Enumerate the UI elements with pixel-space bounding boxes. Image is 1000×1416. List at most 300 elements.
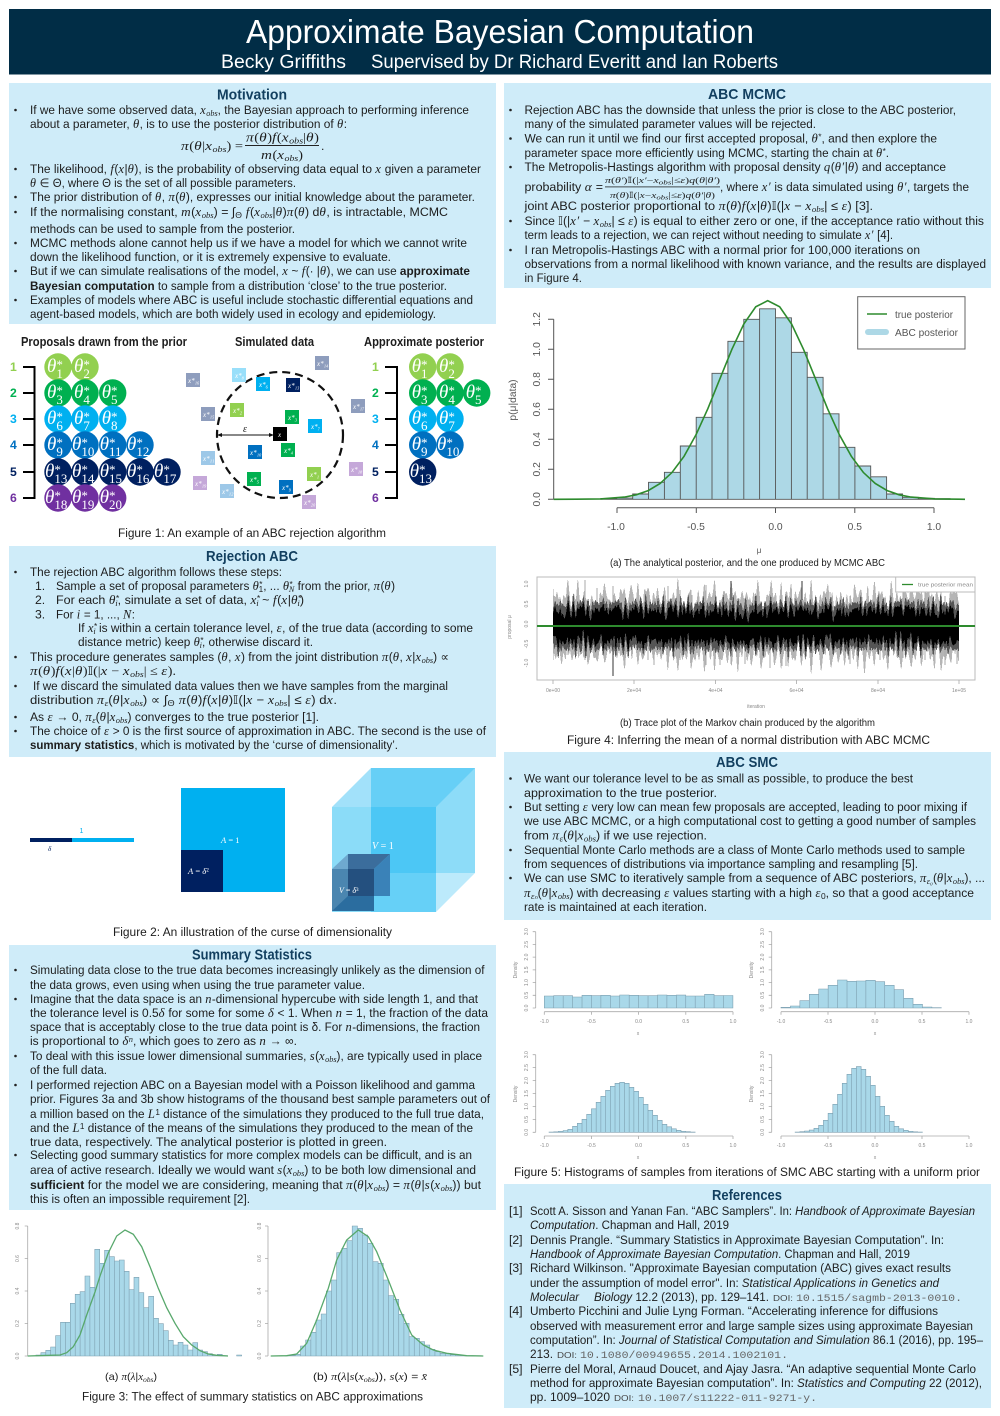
- text block: motivation bullets: , the Bayesian approach to performing inference: [218, 103, 469, 117]
- text block: motivation bullets: The likelihood, f(x|θ), is the probability of observing data equal to x given a parameter: [30, 161, 481, 176]
- text block: rejection bullets: 3.: [35, 608, 45, 622]
- heading: motivation: Motivation: [217, 86, 287, 104]
- text block: SMC bullets: (: [933, 871, 937, 885]
- caption: figure 3: Figure 3: The effect of summary statistics on ABC approximations: [82, 1390, 423, 1404]
- line illustration: [30, 828, 134, 853]
- proposal circles: *: [56, 409, 63, 424]
- header banner: [9, 9, 991, 74]
- accepted proposal circles: 2: [448, 366, 455, 381]
- text block: summary bullets: the tolerance level is 0.5δ for some for some δ < 1. When n = 1, the fraction of the data: [30, 1005, 488, 1020]
- text block: reference list: Pierre del Moral, Arnaud Doucet, and Ajay Jasra. “An adaptive sequential Monte Carlo: [530, 1362, 976, 1376]
- text block: summary bullets: 1: [80, 1121, 85, 1131]
- text block: summary bullets: area of active research. Ideally we would want s(x: [30, 1162, 293, 1177]
- axes: [507, 580, 966, 710]
- chart: iteration 2: 1.0: [760, 979, 766, 986]
- proposal circles: θ: [72, 487, 81, 508]
- text block: MCMC bullets: I ran Metropolis-Hastings ABC with a normal prior for 100,000 iterations on: [524, 243, 920, 257]
- chart caption b: )),: [375, 1371, 390, 1383]
- chart: histogram b: 0.0: [257, 1352, 263, 1359]
- text block: motivation bullets: MCMC methods alone cannot help us if we have a model for which we cannot write: [30, 236, 467, 250]
- text block: rejection bullets: summary statistics, which is motivated by the ‘curse of dimensionality’.: [30, 738, 398, 752]
- chart: iteration 1: 2.0: [524, 953, 530, 961]
- trace: [535, 580, 977, 676]
- proposal circles: 1: [56, 366, 63, 381]
- axes: -1.0: [524, 658, 530, 667]
- accepted proposal circles: θ: [412, 382, 421, 403]
- axes: 8e+04: [871, 688, 885, 694]
- chart: iteration 1: 3.0: [524, 928, 530, 935]
- chart: histogram b: [257, 1222, 483, 1359]
- left bracket with group numbers: 3: [10, 412, 17, 426]
- text block: SMC bullets: ε: [560, 834, 564, 844]
- chart caption a: ): [153, 1371, 157, 1383]
- text block: summary bullets: prior. Figures 3a and 3b show histograms of the thousand best sample parameters out of: [30, 1092, 491, 1106]
- text block: rejection bullets: For each θ: [56, 592, 116, 607]
- text block: MCMC bullets: | ≤: [824, 199, 842, 213]
- accepted proposal circles: θ: [439, 382, 448, 403]
- left bracket with group numbers: 1: [10, 360, 17, 374]
- chart: iteration 1: 1.0: [730, 1019, 737, 1025]
- proposal circles: θ: [72, 461, 81, 482]
- simulated data scatter: x*₁: [309, 471, 319, 479]
- chart: iteration 3: 0.0: [524, 1129, 530, 1136]
- text block: summary bullets: obs: [293, 1168, 305, 1178]
- cube illustration: V = 1: [372, 841, 394, 852]
- text block: summary bullets: the data grows, even using when using the true parameter value.: [30, 978, 365, 992]
- simulated data scatter: x*₈: [234, 372, 245, 380]
- text block: summary bullets: Selecting good summary statistics for more complex models can be difficult, and is an: [30, 1148, 472, 1162]
- proposal circles: θ: [100, 434, 109, 455]
- text block: SMC bullets: [509, 772, 985, 914]
- text block: reference list: [5]: [509, 1362, 523, 1376]
- epsilon arrow: ε: [243, 424, 247, 435]
- text block: rejection bullets: ε).: [161, 663, 175, 678]
- x axis: 0.5: [848, 522, 862, 533]
- text block: summary bullets: ) to be both low dimensional and: [304, 1163, 476, 1177]
- text block: motivation bullets: obs: [202, 210, 214, 220]
- accepted proposal circles: 7: [448, 418, 455, 433]
- accepted proposal circles: 4: [448, 392, 455, 407]
- y axis: [508, 312, 554, 506]
- text block: SMC bullets: ε values starting with a high ε: [664, 885, 821, 900]
- right bracket with group numbers: [372, 360, 397, 505]
- text block: MCMC bullets: , and then explore the: [822, 132, 937, 146]
- text block: SMC bullets: εₙ: [531, 891, 538, 901]
- chart: iteration 4: 0.0: [760, 1129, 766, 1136]
- proposal circles: θ: [154, 461, 163, 482]
- text block: rejection bullets: f(x|θ: [273, 592, 298, 607]
- accepted proposal circles: 6: [421, 418, 428, 433]
- chart: iteration 4: [749, 1051, 973, 1161]
- text block: motivation bullets: agent-based models, which are both widely used in ecology and epidemiology.: [30, 307, 436, 321]
- text block: rejection bullets: 1: [259, 584, 263, 594]
- text block: reference list: 10.1515/sagmb-2013-0010.: [796, 1293, 962, 1305]
- text block: SMC bullets: rate is maintained at each iteration.: [524, 900, 707, 914]
- text block: MCMC bullets: ε) [3].: [842, 198, 872, 213]
- chart: iteration 4: 3.0: [760, 1051, 766, 1058]
- x axis: 0.0: [768, 522, 783, 533]
- chart: iteration 4: 0.5: [919, 1143, 926, 1149]
- equation: posterior: obs: [289, 136, 304, 146]
- text block: motivation bullets: ) = ∫: [214, 205, 236, 219]
- left bracket with group numbers: [10, 360, 34, 505]
- heading: ABC SMC: ABC SMC: [716, 754, 778, 771]
- text block: rejection bullets: , simulate a set of data,: [118, 593, 250, 607]
- chart: iteration 1: 0.0: [524, 1004, 530, 1011]
- text block: reference list: 213.: [530, 1347, 553, 1361]
- chart: iteration 4: 1.0: [966, 1143, 973, 1149]
- text block: SMC bullets: (: [563, 828, 567, 842]
- chart: iteration 3: 0.0: [635, 1143, 642, 1149]
- proposal circles: 8: [111, 418, 118, 433]
- text block: summary bullets: sufficient for the model we are considering, meaning that π(θ|x: [30, 1177, 374, 1192]
- true posterior curve: [554, 301, 965, 499]
- accepted proposal circles: *: [446, 435, 453, 450]
- caption: figure 4b: (b) Trace plot of the Markov chain produced by the algorithm: [620, 718, 875, 729]
- text block: reference list: [2]: [509, 1233, 523, 1247]
- text block: rejection bullets: *: [257, 593, 261, 603]
- chart: iteration 4: 2.5: [760, 1064, 766, 1071]
- text block: MCMC bullets: ε) is equal to either zero or one, if the acceptance ratio without this: [628, 213, 986, 228]
- text block: rejection bullets: | ≤: [144, 664, 161, 678]
- text block: summary bullets: is proportional to δ: [30, 1033, 129, 1048]
- text block: reference list: Richard Wilkinson. "Approximate Bayesian computation (ABC) gives exact results: [530, 1261, 951, 1275]
- figure 5: SMC histograms: [513, 928, 980, 1179]
- proposal circles: 19: [81, 497, 94, 512]
- equation: acceptance ratio: [605, 175, 720, 202]
- text block: rejection bullets: obs: [422, 655, 434, 665]
- text block: rejection bullets: obs: [116, 715, 128, 725]
- chart: iteration 4: 2.0: [760, 1077, 766, 1084]
- chart: iteration 4: -0.5: [824, 1143, 833, 1149]
- text block: motivation bullets: [14, 102, 481, 321]
- heading: ABC MCMC: ABC MCMC: [708, 86, 786, 103]
- equation: posterior: .: [321, 139, 324, 153]
- text block: rejection bullets: from the prior,: [294, 579, 374, 593]
- proposal circles: θ: [100, 461, 109, 482]
- text block: rejection bullets: ) converges to the true posterior [1].: [128, 710, 319, 724]
- text block: motivation bullets: f: [242, 204, 252, 219]
- chart: iteration 2: -0.5: [824, 1019, 833, 1025]
- proposal circles: 17: [163, 471, 177, 486]
- caption: figure 4a: (a) The analytical posterior, and the one produced by MCMC ABC: [610, 558, 885, 569]
- chart: iteration 1: x: [637, 1031, 640, 1037]
- proposal circles: 13: [54, 471, 67, 486]
- proposal circles: 9: [56, 444, 63, 459]
- text block: rejection bullets: N: [288, 584, 296, 594]
- proposal circles: θ: [127, 461, 136, 482]
- chart: iteration 3: 1.0: [730, 1143, 737, 1149]
- text block: MCMC bullets: | ≤: [612, 214, 628, 228]
- proposal circles: θ: [74, 408, 83, 429]
- y axis: p(μ|data): [508, 379, 519, 421]
- chart: iteration 2: 3.0: [760, 928, 766, 935]
- accepted proposal circles: *: [419, 462, 426, 477]
- proposal circles: 5: [111, 392, 118, 407]
- axes: iteration: [747, 704, 765, 710]
- chart: iteration 2: 0.5: [760, 992, 766, 999]
- chart: histogram a: 0.2: [15, 1320, 21, 1327]
- chart: iteration 2: 2.5: [760, 941, 766, 948]
- chart: iteration 1: 2.5: [524, 941, 530, 948]
- text block: MCMC bullets: Rejection ABC has the downside that unless the prior is close to the ABC posterior,: [524, 103, 956, 117]
- text block: MCMC bullets: [509, 103, 986, 285]
- proposal circles: θ: [127, 434, 136, 455]
- proposal circles: 3: [56, 392, 63, 407]
- text block: MCMC bullets: probability α =: [524, 179, 603, 194]
- chart: iteration 2: [749, 928, 973, 1037]
- accepted proposal circles: θ: [439, 408, 448, 429]
- proposal circles: θ: [47, 356, 56, 377]
- text block: summary bullets: obs: [325, 1054, 337, 1064]
- text block: reference list: Biology 12.2 (2013), pp. 129–141.: [594, 1290, 769, 1304]
- equation: acceptance ratio: |≤: [669, 190, 678, 200]
- authors: Becky Griffiths: [221, 52, 346, 73]
- axes: 1e+05: [952, 688, 966, 694]
- text block: rejection bullets: *: [116, 593, 120, 603]
- heading: references: References: [712, 1187, 782, 1204]
- text block: rejection bullets: (θ)f(x|θ)𝕀(|x − x: [186, 692, 274, 707]
- chart: iteration 3: 2.0: [524, 1077, 530, 1084]
- supervisors: Supervised by Dr Richard Everitt and Ian Roberts: [371, 52, 778, 73]
- chart: iteration 4: 1.5: [760, 1090, 766, 1097]
- left bracket with group numbers: 4: [10, 438, 17, 452]
- chart: iteration 2: 2.0: [760, 953, 766, 961]
- proposal circles: *: [83, 383, 90, 398]
- text block: rejection bullets: | ≤: [287, 693, 305, 707]
- text block: rejection bullets: The rejection ABC algorithm follows these steps:: [30, 565, 282, 579]
- text block: rejection bullets: ε, of the true data (according to some: [277, 620, 478, 635]
- text block: SMC bullets: obs: [584, 834, 597, 844]
- caption: figure 4: Figure 4: Inferring the mean of a normal distribution with ABC MCMC: [567, 733, 930, 747]
- figure 1: ABC rejection diagram: [10, 335, 490, 540]
- proposal circles: 2: [83, 366, 90, 381]
- proposal circles: 7: [83, 418, 90, 433]
- text block: SMC bullets: (: [538, 886, 542, 900]
- simulated data scatter: x*₁₇: [352, 403, 365, 411]
- text block: rejection bullets: ε: [105, 698, 109, 708]
- equation: posterior: m(x: [261, 147, 284, 162]
- text block: MCMC bullets: *: [883, 146, 886, 156]
- text block: rejection bullets: θ|x: [100, 709, 116, 724]
- axes: 0e+00: [546, 688, 560, 694]
- proposal circles: 12: [136, 444, 149, 459]
- simulated data scatter: x*₁₂: [221, 488, 234, 496]
- chart: iteration 4: 1.0: [760, 1103, 766, 1110]
- chart: iteration 1: 0.5: [682, 1019, 689, 1025]
- epsilon arrow: [217, 424, 274, 437]
- chart: iteration 3: Density: [513, 1085, 519, 1102]
- simulated data scatter: x*₆: [258, 381, 269, 389]
- text block: SMC bullets: from π: [524, 828, 559, 842]
- column heading: proposals: Proposals drawn from the prior: [21, 335, 187, 349]
- chart caption a: (a) π(λ|x: [105, 1371, 143, 1383]
- text block: MCMC bullets: term leads to a rejection, we can reject without needing to simulate x′ [4].: [524, 227, 893, 242]
- proposal circles: *: [109, 488, 116, 503]
- text block: rejection bullets: If we discard the simulated data values then we have samples from the marginal: [33, 679, 448, 693]
- histogram bars: [601, 309, 950, 499]
- text block: summary bullets: Imagine that the data space is an n-dimensional hypercube with side length 1, and that: [30, 991, 479, 1006]
- legend: ABC posterior: [895, 328, 959, 339]
- chart: histogram b: 0.6: [257, 1255, 263, 1262]
- simulated data scatter: x*₁₆: [187, 377, 200, 385]
- proposal circles: *: [83, 409, 90, 424]
- text block: rejection bullets: ): [300, 593, 304, 607]
- y axis: 1.0: [532, 342, 543, 356]
- simulated data scatter: x*₁₄: [316, 360, 329, 368]
- text block: summary bullets: ), are typically used in place: [337, 1049, 482, 1063]
- text block: rejection bullets: π(θ): [374, 578, 395, 593]
- chart: iteration 4: -1.0: [777, 1143, 786, 1149]
- text block: motivation bullets: Examples of models where ABC is useful include stochastic differential equations and: [30, 293, 473, 307]
- text block: rejection bullets: obs: [275, 698, 288, 708]
- legend: true posterior: [895, 310, 954, 321]
- proposal circles: θ: [100, 487, 109, 508]
- text block: reference list: [4]: [509, 1304, 523, 1318]
- text block: summary bullets: and the L: [30, 1120, 80, 1135]
- text block: summary bullets: space that is acceptably close to the true data point is δ. For n-dimensions, the fraction: [30, 1019, 480, 1034]
- simulated data scatter: x*₇: [310, 423, 321, 431]
- chart: iteration 3: [513, 1051, 737, 1161]
- text block: SMC bullets: ) if we use rejection.: [596, 828, 707, 842]
- caption: figure 2: Figure 2: An illustration of the curse of dimensionality: [113, 925, 393, 939]
- panel: references: [504, 1184, 991, 1408]
- equation: posterior: obs: [213, 144, 227, 154]
- proposal circles: θ: [47, 434, 56, 455]
- proposal circles: [44, 353, 181, 512]
- accepted proposal circles: 10: [446, 444, 459, 459]
- proposal circles: *: [136, 462, 143, 477]
- text block: rejection bullets: π(θ)f(x|θ)𝕀(|x − x: [30, 663, 129, 678]
- text block: MCMC bullets: obs: [812, 204, 825, 214]
- text block: SMC bullets: , so that a good acceptance: [826, 886, 974, 900]
- panel: motivation: [9, 83, 496, 324]
- text block: MCMC bullets: We can run it until we find our first accepted proposal, θ: [524, 130, 818, 146]
- text block: MCMC bullets: observations from a normal likelihood with known variance, and the results are displayed: [524, 257, 986, 271]
- text block: reference list: [3]: [509, 1261, 523, 1275]
- text block: summary bullets: To deal with this issue lower dimensional summaries, s(x: [30, 1048, 325, 1063]
- left bracket with group numbers: 2: [10, 386, 17, 400]
- chart: iteration 4: Density: [749, 1085, 755, 1102]
- text block: rejection bullets: ~: [259, 593, 273, 607]
- proposal circles: *: [111, 409, 118, 424]
- proposal circles: *: [81, 462, 88, 477]
- accepted proposal circles: θ: [412, 408, 421, 429]
- chart: iteration 3: -1.0: [540, 1143, 549, 1149]
- accepted proposal circles: *: [421, 409, 428, 424]
- line illustration: δ: [48, 845, 52, 853]
- axes: 6e+04: [789, 688, 804, 694]
- accepted proposal circles: 1: [421, 366, 428, 381]
- text block: rejection bullets: ε) dx.: [305, 692, 337, 707]
- text block: MCMC bullets: parameter space more efficiently using MCMC, starting the chain at θ: [524, 145, 888, 160]
- simulated data scatter: x*₁₈: [350, 466, 363, 474]
- proposal circles: θ: [72, 434, 81, 455]
- column heading: simulated data: Simulated data: [235, 335, 315, 349]
- text block: summary bullets: n: [129, 1034, 133, 1044]
- text block: summary bullets: ) =: [385, 1178, 403, 1192]
- chart: iteration 1: 0.0: [635, 1019, 642, 1025]
- simulated data scatter: x*₄: [283, 447, 294, 455]
- y axis: 1.2: [532, 312, 543, 326]
- chart: iteration 1: [513, 928, 737, 1037]
- figure 2: curse of dimensionality: [30, 768, 475, 939]
- square illustration: A = 1: [220, 835, 240, 845]
- equation: posterior: π(θ)f(x: [246, 130, 288, 144]
- equation: acceptance ratio: obs: [659, 180, 672, 186]
- x axis: μ: [757, 546, 762, 555]
- text block: rejection bullets: i: [93, 626, 96, 636]
- text block: rejection bullets: (: [96, 710, 100, 724]
- chart caption a: obs: [143, 1376, 154, 1384]
- proposal circles: 18: [54, 497, 67, 512]
- legend: [858, 297, 965, 349]
- chart: iteration 3: 1.0: [524, 1103, 530, 1110]
- text block: summary bullets: a million based on the L: [30, 1106, 156, 1121]
- text block: SMC bullets: θ|x: [542, 885, 558, 900]
- accepted proposal circles: θ: [437, 434, 446, 455]
- right bracket with group numbers: 1: [372, 360, 379, 374]
- text block: summary bullets: , which goes to zero as: [133, 1034, 259, 1048]
- text block: SMC bullets: obs: [953, 876, 965, 886]
- panel: ABC MCMC: [504, 83, 991, 288]
- axes: proposal μ: [507, 615, 513, 639]
- text block: motivation bullets: θ ∈ Θ, where Θ is the set of all possible parameters.: [30, 175, 296, 190]
- right bracket with group numbers: 4: [372, 438, 379, 452]
- chart: iteration 1: -1.0: [540, 1019, 549, 1025]
- accepted proposal circles: *: [421, 357, 428, 372]
- equation: acceptance ratio: π(θ′ )𝕀(| x′ −x: [605, 175, 657, 185]
- square illustration: A = δ²: [187, 866, 209, 876]
- text block: summary bullets: Simulating data close to the true data becomes increasingly unlikely as the dimension of: [30, 963, 485, 977]
- chart: histogram a: 0.8: [15, 1222, 21, 1229]
- legend: true posterior mean: [918, 582, 973, 588]
- x axis: 1.0: [927, 522, 941, 533]
- text block: rejection bullets: For i = 1, ..., N:: [56, 606, 135, 622]
- caption: figure 5: Figure 5: Histograms of samples from iterations of SMC ABC starting with a uniform prior: [514, 1165, 980, 1179]
- chart: iteration 4: 0.0: [872, 1143, 879, 1149]
- equation: acceptance ratio: π(θ)𝕀(| x−x: [610, 190, 655, 200]
- text block: rejection bullets: (: [108, 693, 113, 707]
- text block: MCMC bullets: *: [818, 132, 822, 142]
- chart: iteration 2: 0.0: [872, 1019, 879, 1025]
- chart: histogram a: [15, 1222, 242, 1359]
- figure 3: summary statistic histograms: [15, 1222, 483, 1404]
- square illustration: [181, 788, 285, 892]
- text block: SMC bullets: π: [524, 885, 531, 900]
- proposal circles: *: [56, 383, 63, 398]
- text block: rejection bullets: π: [175, 692, 186, 707]
- text block: rejection bullets: obs: [130, 698, 144, 708]
- text block: MCMC bullets: .: [886, 146, 889, 160]
- text block: motivation bullets: |: [272, 205, 276, 219]
- simulated data scatter: x*₁₃: [287, 382, 300, 390]
- text block: SMC bullets: We want our tolerance level to be as small as possible, to produce the best: [524, 772, 914, 786]
- text block: motivation bullets: θ)π(θ) dθ, is intractable, MCMC: [276, 204, 446, 219]
- right bracket with group numbers: 3: [372, 412, 379, 426]
- text block: SMC bullets: But setting ε very low can mean few proposals are accepted, leading to poor mixing if: [524, 799, 968, 814]
- chart: iteration 2: -1.0: [777, 1019, 786, 1025]
- chart: iteration 2: 0.0: [760, 1004, 766, 1011]
- accepted proposal circles: *: [421, 435, 428, 450]
- text block: reference list: 10.1007/s11222-011-9271-y.: [638, 1393, 817, 1405]
- axes: 1.0: [524, 580, 530, 587]
- text block: rejection bullets: Θ: [168, 698, 175, 708]
- text block: rejection bullets: i: [256, 598, 259, 608]
- text block: reference list: DOI:: [773, 1293, 793, 1303]
- text block: rejection bullets: θ|x: [113, 692, 130, 707]
- chart: iteration 3: -0.5: [587, 1143, 596, 1149]
